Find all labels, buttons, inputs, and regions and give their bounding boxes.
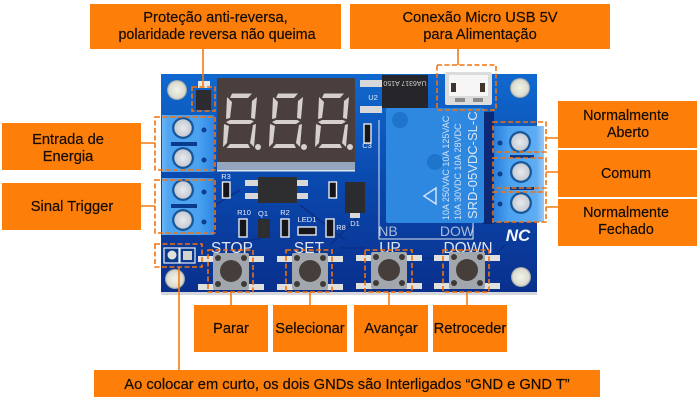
regulator chip [360, 75, 428, 113]
label: forward [354, 305, 428, 352]
diode [196, 81, 211, 110]
label: power input: Energia [43, 149, 94, 165]
silkscreen labels: LED1 [298, 215, 316, 224]
label: anti-reverse protection: Proteção anti-reversa, [143, 10, 288, 26]
silkscreen labels: R3 [221, 172, 231, 181]
silkscreen labels: R10 [237, 208, 251, 217]
optocoupler [245, 177, 308, 203]
label: power input: Entrada de [32, 132, 104, 148]
label: back: Retroceder [434, 321, 506, 337]
callout dashed outlines [155, 65, 546, 292]
label: normally open: Aberto [607, 125, 649, 141]
callout connector lines [141, 49, 558, 370]
label: GND jumper note [94, 370, 600, 397]
label: trigger signal [2, 183, 141, 230]
label: select [273, 305, 347, 352]
jumper pads [164, 248, 195, 263]
label: anti-reverse protection: polaridade reversa não queima [118, 27, 316, 43]
label: common: Comum [601, 166, 651, 182]
board traces [215, 190, 505, 258]
regulator chip: UA6317 A150 [383, 79, 427, 86]
silkscreen labels [211, 93, 531, 257]
label: GND jumper note: Ao colocar em curto, os dois GNDs são Interligados “GND e GND T” [124, 377, 570, 393]
small components [222, 124, 371, 238]
label: normally closed: Fechado [598, 222, 654, 238]
label: anti-reverse protection [90, 4, 341, 49]
silkscreen labels: R8 [336, 223, 346, 232]
label: normally open: Normalmente [583, 108, 669, 124]
label: trigger signal: Sinal Trigger [31, 199, 113, 215]
silkscreen labels: DOWN [443, 240, 493, 257]
silkscreen labels: D1 [350, 219, 360, 228]
label: normally closed [558, 199, 697, 246]
second diode [345, 182, 365, 218]
label: normally open [558, 101, 697, 148]
silkscreen labels: UP [379, 240, 401, 257]
left terminal blocks [162, 115, 214, 235]
label: power input [2, 123, 141, 170]
relay: 10A 30VDC 10A 28VDC [453, 123, 463, 220]
label: micro USB power [350, 4, 610, 49]
label: stop: Parar [213, 321, 249, 337]
silkscreen labels: C3 [362, 141, 372, 150]
micro USB connector [445, 72, 492, 105]
label: stop [194, 305, 268, 352]
right terminal block [494, 126, 544, 222]
label: common [558, 150, 697, 197]
silkscreen labels: STOP [211, 240, 253, 257]
silkscreen labels: NC [506, 226, 531, 245]
label: forward: Avançar [364, 321, 418, 337]
digit 1 [223, 94, 257, 148]
circuit board [161, 72, 544, 295]
label: micro USB power: para Alimentação [423, 27, 537, 43]
silkscreen labels: NB [378, 223, 398, 239]
label: micro USB power: Conexão Micro USB 5V [402, 10, 558, 26]
relay [379, 108, 494, 239]
silkscreen labels: Q1 [258, 209, 268, 218]
silkscreen labels: R2 [280, 208, 290, 217]
silkscreen labels: SET [294, 240, 325, 257]
decimal points [255, 144, 353, 150]
label: normally closed: Normalmente [583, 205, 669, 221]
push buttons [198, 252, 500, 290]
digit 2 [269, 94, 303, 148]
label: back [433, 305, 507, 352]
silkscreen labels: DOW [440, 223, 475, 239]
seven-segment display [217, 78, 355, 172]
label: select: Selecionar [275, 321, 345, 337]
digit 3 [315, 94, 349, 148]
relay: SRD-05VDC-SL-C [465, 111, 480, 219]
mounting holes [165, 78, 531, 289]
silkscreen labels: U2 [368, 93, 378, 102]
relay: 10A 250VAC 10A 125VAC [441, 115, 451, 220]
